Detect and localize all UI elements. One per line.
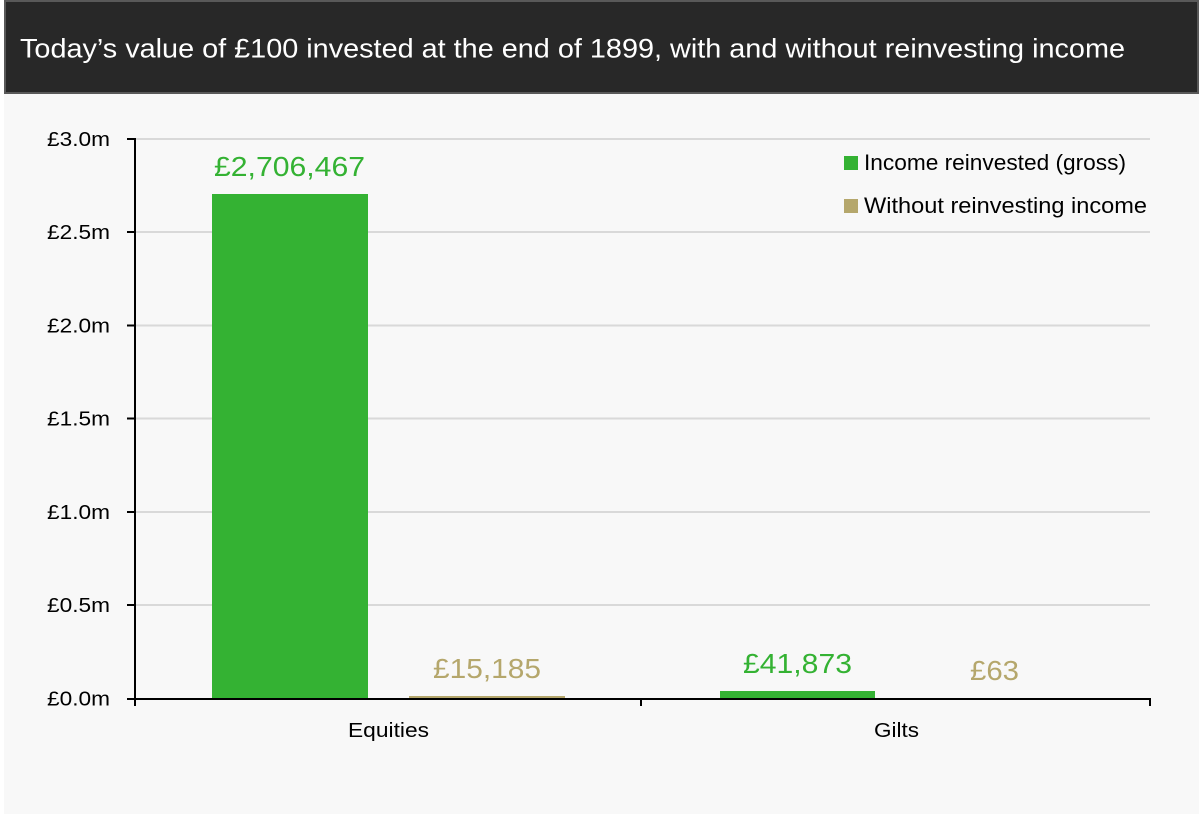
legend item: without reinvesting: Without reinvesting income	[864, 193, 1147, 218]
bar chart	[47, 128, 1151, 742]
x axis labels: Equities	[348, 719, 429, 742]
axes	[127, 138, 1151, 706]
panel: title bar	[5, 1, 1198, 93]
data labels: £41,873	[743, 648, 852, 679]
legend	[844, 150, 1147, 218]
data labels: £15,185	[433, 653, 541, 684]
title: Today’s value of £100 invested at the end of 1899, with and without reinvesting income	[20, 34, 1125, 64]
y axis labels: £1.5m	[47, 408, 110, 430]
y axis labels	[47, 128, 110, 710]
data labels	[214, 151, 1019, 686]
y axis labels: £1.0m	[47, 501, 110, 524]
data labels: £2,706,467	[214, 151, 365, 182]
bar: equities without reinvesting	[409, 696, 565, 699]
legend item: income reinvested: Income reinvested (gross)	[864, 150, 1126, 175]
x axis labels	[348, 719, 919, 742]
y axis labels: £3.0m	[47, 128, 110, 151]
bar: gilts income reinvested	[720, 691, 875, 699]
y axis labels: £0.5m	[47, 594, 110, 617]
data labels: £63	[970, 655, 1019, 686]
x axis labels: Gilts	[874, 719, 919, 742]
y axis labels: £2.5m	[47, 221, 110, 244]
bar: equities income reinvested	[212, 194, 368, 699]
y axis labels: £0.0m	[47, 688, 110, 710]
y axis labels: £2.0m	[47, 314, 110, 338]
